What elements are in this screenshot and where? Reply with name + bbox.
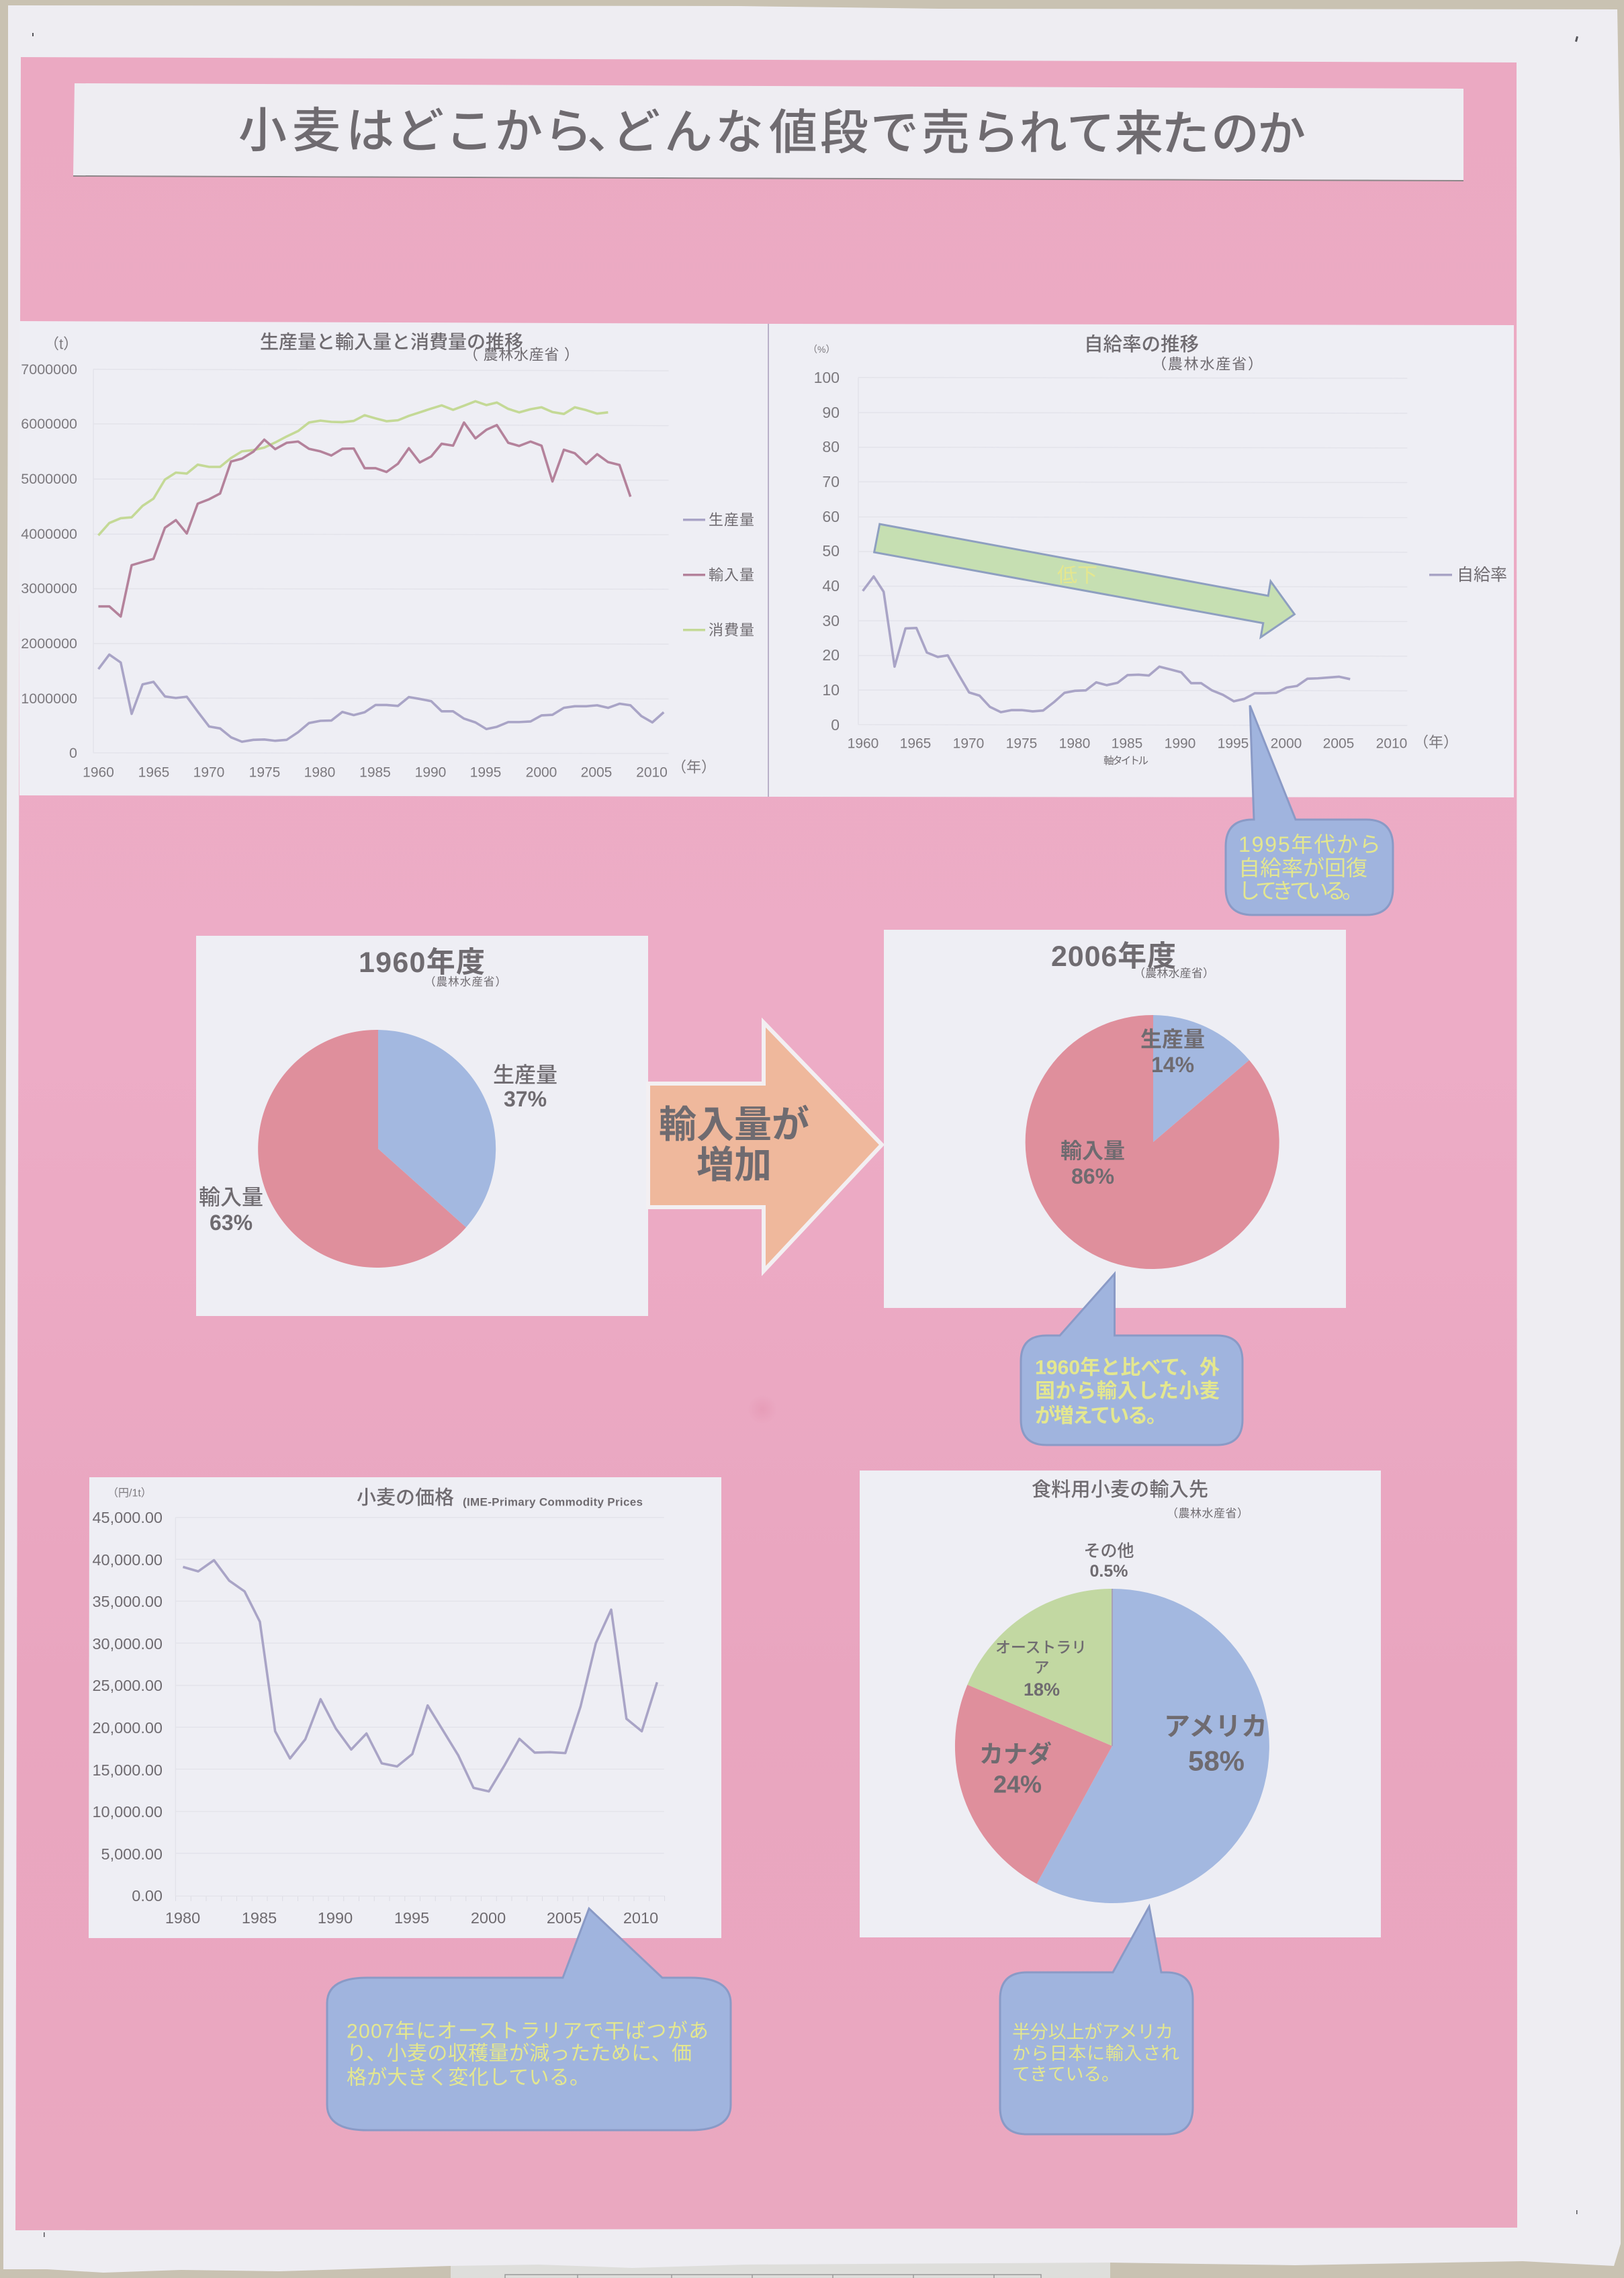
panel: 2006 pie chart: [884, 930, 1346, 1308]
x axis labels: 1980: [165, 1909, 200, 1927]
label: Australia: [995, 1638, 1087, 1700]
y axis labels: 15,000.00: [92, 1761, 163, 1779]
x axis labels: 2010: [623, 1909, 658, 1927]
y axis labels: 20: [822, 646, 840, 664]
label: import: 86%: [1071, 1164, 1114, 1188]
callout: 2007 Australian drought: [327, 1909, 731, 2130]
x axis labels: [848, 736, 1407, 751]
heading: 2006年度: [1051, 940, 1176, 973]
chart title: 食料用小麦の輸入先: [1032, 1479, 1208, 1501]
x axis labels: 2000: [526, 764, 557, 781]
x axis labels: 1990: [318, 1909, 353, 1927]
y axis labels: 30,000.00: [92, 1635, 163, 1653]
callout: over half from USA: てきている。: [1012, 2064, 1120, 2085]
label: Australia: 18%: [1024, 1679, 1060, 1700]
panel: self-sufficiency rate line chart: [768, 324, 1514, 797]
label: production: 生産量: [1140, 1027, 1205, 1051]
label: USA: アメリカ: [1164, 1713, 1267, 1741]
callout: recovery since 1995: してきている。: [1238, 879, 1363, 903]
y axis labels: 100: [814, 369, 840, 386]
y axis labels: 7000000: [21, 361, 77, 378]
legend: 消費量: [709, 622, 754, 638]
self-sufficiency line: [863, 576, 1350, 712]
pie: [258, 1030, 496, 1268]
pie: [1026, 1015, 1279, 1269]
x axis labels: [83, 764, 668, 781]
title banner: [73, 83, 1463, 181]
chart source: (IME-Primary Commodity Prices: [463, 1495, 643, 1509]
sheet under the poster: [451, 2257, 1110, 2278]
callout: over half from USA: [1000, 1907, 1193, 2134]
x axis labels: 2000: [1271, 736, 1302, 751]
callout: 2007 Australian drought: 2007年にオーストラリアで干ばつがあ: [347, 2021, 709, 2042]
legend: 自給率: [1457, 566, 1507, 584]
x axis labels: 1995: [1218, 736, 1249, 751]
x axis labels: 1990: [1165, 736, 1196, 751]
x axis labels: 1980: [304, 764, 335, 781]
label: import: [1061, 1139, 1125, 1188]
x axis labels: [165, 1909, 658, 1927]
y axis labels: 70: [822, 473, 840, 490]
production line: [98, 654, 664, 742]
label: import: 輸入量: [199, 1185, 263, 1209]
chart source: （農林水産省）: [1152, 356, 1263, 372]
y axis labels: 40: [822, 577, 840, 595]
plotted line and trend arrow: [858, 378, 1407, 726]
label: production: 生産量: [493, 1063, 557, 1087]
x axis labels: 2005: [581, 764, 612, 781]
label: USA: [1164, 1713, 1267, 1776]
axis title: 軸タイトル: [1103, 755, 1148, 767]
callout: more imports than 1960: [1021, 1274, 1243, 1445]
x axis labels: 1970: [193, 764, 224, 781]
y axis labels: 20,000.00: [92, 1719, 163, 1737]
blemish: [748, 1395, 777, 1424]
y axis labels: [92, 1509, 163, 1904]
price line: [175, 1518, 664, 1896]
label: production: [493, 1063, 557, 1111]
x axis labels: 1960: [83, 764, 114, 781]
callout: 2007 Australian drought: り、小麦の収穫量が減ったために、価: [347, 2042, 692, 2065]
label: Australia: オーストラリ: [995, 1638, 1087, 1656]
y axis labels: [21, 361, 77, 761]
y axis labels: 3000000: [21, 580, 77, 597]
title: 小麦はどこから、どんな値段で売られて来たのか: [238, 104, 1306, 162]
arrow: imports increased: [648, 1022, 882, 1271]
y axis labels: 2000000: [21, 636, 77, 652]
x axis labels: 1975: [1006, 736, 1037, 751]
x axis labels: 2000: [471, 1909, 506, 1927]
y axis labels: 0: [831, 716, 840, 734]
label: Canada: 24%: [993, 1771, 1042, 1798]
y axis labels: 40,000.00: [92, 1551, 163, 1569]
legend: [1429, 566, 1507, 584]
x axis labels: 1990: [415, 764, 446, 781]
callout: more imports than 1960: が増えている。: [1035, 1404, 1167, 1427]
label: production: 37%: [504, 1087, 547, 1111]
unit label: （円/1t）: [107, 1487, 152, 1499]
y axis labels: 45,000.00: [92, 1509, 163, 1526]
y axis labels: 50: [822, 542, 840, 560]
x axis labels: 1995: [470, 764, 501, 781]
unit label: （%）: [808, 344, 835, 355]
y axis labels: 5,000.00: [101, 1845, 163, 1863]
callout: over half from USA: から日本に輸入され: [1012, 2044, 1179, 2064]
y axis labels: 90: [822, 404, 840, 421]
consumption line: [98, 401, 608, 535]
callout: recovery since 1995: 自給率が回復: [1238, 856, 1367, 880]
import line: [98, 423, 631, 617]
year unit: （年）: [672, 759, 716, 775]
year unit: （年）: [1414, 734, 1458, 751]
x axis labels: 1980: [1059, 736, 1090, 751]
x axis labels: 1995: [394, 1909, 429, 1927]
y axis labels: 0: [69, 745, 77, 761]
label: import: 輸入量: [1061, 1139, 1125, 1163]
y axis labels: 4000000: [21, 526, 77, 542]
panel: wheat import sources pie chart: [860, 1471, 1381, 1937]
x axis labels: 1975: [249, 764, 280, 781]
y axis labels: 25,000.00: [92, 1677, 163, 1694]
panel: wheat price line chart: [89, 1477, 721, 1938]
label: import: 63%: [210, 1211, 253, 1235]
arrow: imports increased: 増加: [696, 1143, 772, 1186]
x axis labels: 1985: [359, 764, 391, 781]
legend: 生産量: [709, 512, 754, 528]
panel: 1960 pie chart: [196, 936, 648, 1316]
callout: more imports than 1960: 1960年と比べて、外: [1035, 1357, 1220, 1378]
label: Canada: カナダ: [979, 1740, 1052, 1768]
chart title: 生産量と輸入量と消費量の推移: [260, 332, 523, 352]
x axis labels: 1965: [900, 736, 931, 751]
arrow: declining trend: [874, 524, 1294, 638]
x axis labels: 1965: [138, 764, 169, 781]
callout: 2007 Australian drought: 格が大きく変化している。: [347, 2066, 590, 2089]
chart title: 小麦の価格: [357, 1487, 454, 1509]
label: import: [199, 1185, 263, 1235]
x axis labels: 1985: [1112, 736, 1142, 751]
callout: recovery since 1995: 1995年代から: [1238, 832, 1381, 857]
label: Canada: [979, 1740, 1052, 1798]
callout: more imports than 1960: 国から輸入した小麦: [1035, 1380, 1220, 1403]
arrow: imports increased: 輸入量が: [659, 1103, 809, 1146]
x axis labels: 1960: [848, 736, 878, 751]
y axis labels: 80: [822, 438, 840, 455]
label: other: [1083, 1542, 1134, 1581]
x axis labels: 1985: [242, 1909, 277, 1927]
y axis labels: 10,000.00: [92, 1803, 163, 1821]
x axis labels: 1970: [953, 736, 984, 751]
pie: [955, 1589, 1269, 1903]
x axis labels: 2010: [1376, 736, 1407, 751]
source: （農林水産省）: [424, 975, 506, 988]
y axis labels: 1000000: [21, 691, 77, 707]
callout: over half from USA: 半分以上がアメリカ: [1012, 2022, 1173, 2042]
legend: [683, 512, 754, 638]
chart title: 自給率の推移: [1084, 334, 1199, 355]
plotted lines: [93, 369, 669, 754]
label: production: [1140, 1027, 1205, 1077]
y axis labels: 0.00: [132, 1887, 163, 1904]
arrow label: 低下: [1057, 564, 1097, 587]
label: USA: 58%: [1188, 1745, 1245, 1776]
x axis labels: 2010: [636, 764, 668, 781]
x axis labels: 2005: [1323, 736, 1354, 751]
callout: recovery since 1995: [1226, 705, 1393, 915]
y axis labels: 6000000: [21, 416, 77, 432]
label: other: 0.5%: [1090, 1562, 1128, 1581]
unit label: （t）: [44, 336, 78, 352]
y axis labels: 30: [822, 612, 840, 629]
x axis labels: 2005: [547, 1909, 582, 1927]
legend: 輸入量: [709, 567, 754, 583]
source: （農林水産省）: [1167, 1507, 1249, 1520]
source: （農林水産省）: [1134, 967, 1214, 979]
y axis labels: [814, 369, 840, 734]
y axis labels: 60: [822, 508, 840, 525]
y axis labels: 5000000: [21, 471, 77, 487]
heading: 1960年度: [359, 947, 485, 979]
label: production: 14%: [1151, 1053, 1194, 1077]
label: other: その他: [1083, 1542, 1134, 1561]
label: Australia: ア: [1034, 1659, 1049, 1676]
chart source: （ 農林水産省 ）: [463, 347, 579, 363]
y axis labels: 10: [822, 681, 840, 699]
panel: production, import and consumption line chart: [19, 321, 768, 797]
y axis labels: 35,000.00: [92, 1593, 163, 1610]
